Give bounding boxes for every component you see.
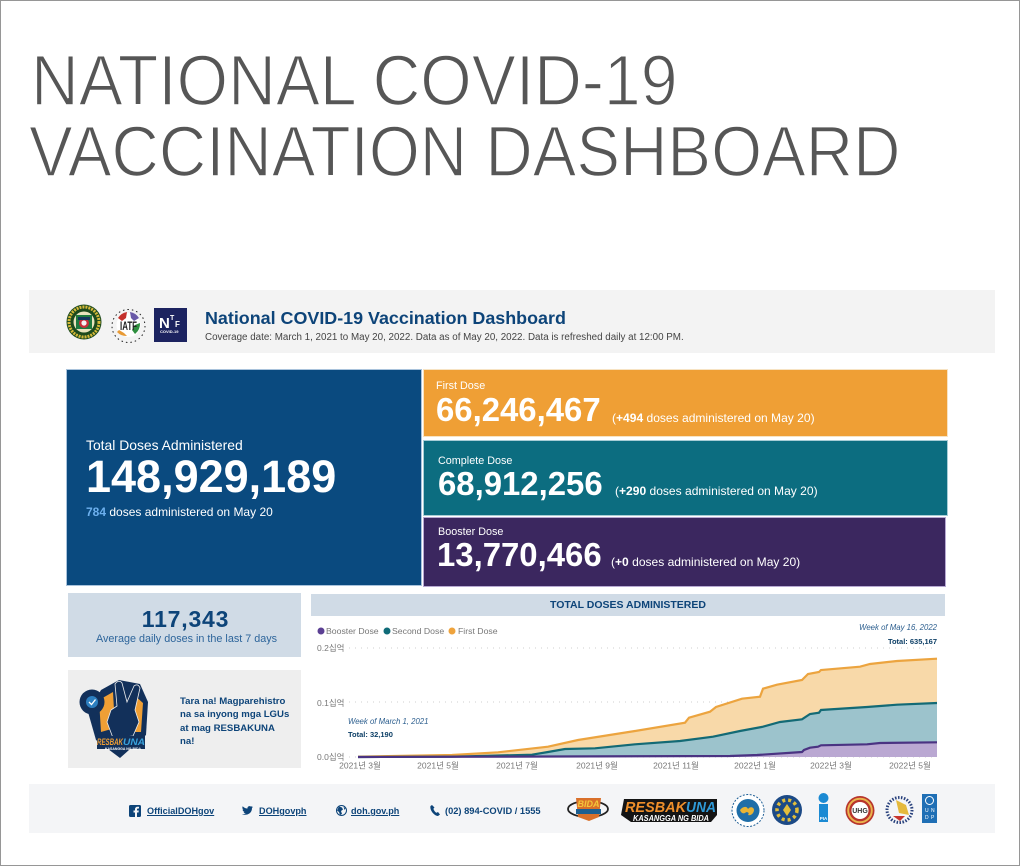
text: promo message: na! xyxy=(180,736,194,747)
icon: facebook xyxy=(129,805,141,817)
title: NATIONAL COVID-19 xyxy=(31,42,677,121)
x axis labels xyxy=(339,760,931,770)
number: booster dose: 13,770,466 xyxy=(437,536,602,573)
panel: chart xyxy=(311,594,945,770)
logo: RESBAKUNA: KASANGGA NG BIDA xyxy=(633,814,709,823)
logo: BIDA: BIDA xyxy=(578,799,600,809)
icon: NTF logo: N xyxy=(159,315,170,332)
icon: IATF logo: IATF xyxy=(120,319,137,333)
panel: complete dose xyxy=(423,440,948,516)
logo: PIA: PIA xyxy=(820,816,828,821)
panel: total doses xyxy=(66,369,422,586)
heading: dashboard name: National COVID-19 Vaccination Dashboard xyxy=(205,308,566,328)
icon: NTF logo: COVID-19 xyxy=(160,329,178,334)
label: complete dose: Complete Dose xyxy=(438,455,512,467)
x axis labels: 2021년 5월 xyxy=(417,760,459,770)
logo: UNDP xyxy=(922,794,937,823)
icon: NTF logo: T xyxy=(170,315,174,322)
chart legend: Second Dose xyxy=(392,626,444,636)
panel: header band xyxy=(29,290,995,353)
link: facebook: OfficialDOHgov xyxy=(147,806,214,816)
logo: dotted seal xyxy=(886,796,914,824)
logo: seal navy xyxy=(772,795,802,825)
text: promo message: na sa inyong mga LGUs xyxy=(180,709,289,720)
logo: PIA xyxy=(818,793,828,822)
icon: resbakuna shield xyxy=(80,680,148,758)
icon: NTF logo xyxy=(154,308,187,342)
x axis labels: 2022년 5월 xyxy=(889,760,931,770)
number: first dose: 66,246,467 xyxy=(436,391,601,428)
first dose area xyxy=(358,659,937,757)
text: coverage date: Coverage date: March 1, 2021 to May 20, 2022. Data as of May 20, 2022. Data is refreshed daily at 12:00 PM. xyxy=(205,332,684,343)
panel: first dose xyxy=(423,369,948,437)
chart legend xyxy=(318,626,498,636)
y axis labels: 0.0십억 xyxy=(317,752,344,762)
logo: RESBAKUNA xyxy=(621,799,717,823)
second dose line xyxy=(358,703,937,757)
y axis labels xyxy=(317,643,344,762)
x axis labels: 2021년 7월 xyxy=(496,760,538,770)
number: complete dose: 68,912,256 xyxy=(438,465,603,502)
label: booster dose: Booster Dose xyxy=(438,526,503,538)
text: booster dose today: (+0 doses administered on May 20) xyxy=(611,555,800,569)
text: promo message: at mag RESBAKUNA xyxy=(180,723,275,734)
annotation: latest week: Total: 635,167 xyxy=(888,637,937,646)
annotation: first week: Total: 32,190 xyxy=(348,730,393,739)
annotation: first week: Week of March 1, 2021 xyxy=(348,717,428,726)
x axis labels: 2021년 11월 xyxy=(653,760,699,770)
area chart xyxy=(317,623,938,770)
number: average daily doses: 117,343 xyxy=(142,606,229,632)
icon: DOH seal xyxy=(66,304,102,340)
logo: UHG seal: UHG xyxy=(852,808,868,815)
heading: chart title xyxy=(311,594,945,616)
booster dose line xyxy=(358,742,937,757)
booster dose area xyxy=(630,742,937,757)
logo: UHG seal xyxy=(846,796,874,825)
second dose area xyxy=(358,703,937,757)
text: promo message xyxy=(180,696,289,747)
annotation: latest week: Week of May 16, 2022 xyxy=(859,623,938,632)
panel: average daily doses xyxy=(68,593,301,657)
icon: resbakuna shield: KASANGGA NG BIDA xyxy=(105,747,142,751)
panel: promo xyxy=(68,670,301,768)
logo: RESBAKUNA: RESBAK xyxy=(625,799,687,816)
title: VACCINATION DASHBOARD xyxy=(29,113,900,192)
panel: booster dose xyxy=(423,517,946,587)
logo: seal blue and gold xyxy=(732,794,764,827)
chart legend: Booster Dose xyxy=(326,626,379,636)
y axis labels: 0.1십억 xyxy=(317,698,344,708)
text: phone number: (02) 894-COVID / 1555 xyxy=(445,806,541,816)
logo: UNDP: P xyxy=(931,815,934,821)
panel: footer xyxy=(29,784,995,833)
chart legend: First Dose xyxy=(458,626,498,636)
logo: UNDP: U xyxy=(925,808,929,814)
logo: UNDP: D xyxy=(925,815,929,821)
icon: twitter xyxy=(242,806,253,815)
gridlines xyxy=(349,648,937,757)
logo: RESBAKUNA: UNA xyxy=(686,799,716,816)
icon: phone xyxy=(430,805,440,816)
x axis labels: 2022년 3월 xyxy=(810,760,852,770)
annotation: first week xyxy=(348,717,428,739)
text: promo message: Tara na! Magparehistro xyxy=(180,696,285,707)
icon: resbakuna shield: UNA xyxy=(123,737,145,747)
link: twitter: DOHgovph xyxy=(259,806,306,816)
logo: BIDA xyxy=(567,798,609,821)
heading: chart title: TOTAL DOSES ADMINISTERED xyxy=(550,599,706,611)
text: average daily caption: Average daily doses in the last 7 days xyxy=(96,633,277,645)
first dose line xyxy=(358,659,937,757)
icon: resbakuna shield: RESBAK xyxy=(97,737,124,747)
annotation: latest week xyxy=(859,623,938,646)
logo: UNDP: N xyxy=(931,808,935,814)
number: total doses: 148,929,189 xyxy=(86,451,336,502)
text: first dose today: (+494 doses administered on May 20) xyxy=(612,411,815,425)
y axis labels: 0.2십억 xyxy=(317,643,344,653)
label: first dose: First Dose xyxy=(436,380,485,392)
icon: globe xyxy=(336,805,347,816)
text: total doses today: 784 doses administered on May 20 xyxy=(86,505,273,519)
icon: IATF logo xyxy=(112,309,146,343)
x axis labels: 2021년 3월 xyxy=(339,760,381,770)
x axis labels: 2021년 9월 xyxy=(576,760,618,770)
link: website: doh.gov.ph xyxy=(351,806,399,816)
text: complete dose today: (+290 doses administered on May 20) xyxy=(615,484,818,498)
label: total doses: Total Doses Administered xyxy=(86,437,243,453)
title xyxy=(29,42,900,192)
x axis labels: 2022년 1월 xyxy=(734,760,776,770)
icon: NTF logo: F xyxy=(175,320,180,329)
